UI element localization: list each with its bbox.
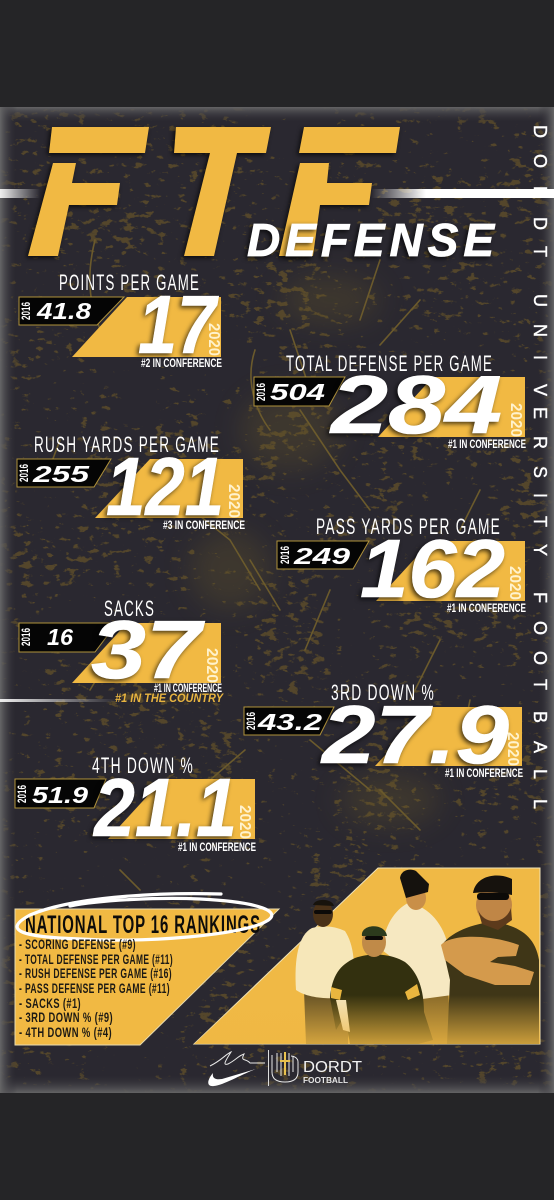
icon: dordt crest: [272, 1052, 298, 1082]
brush circle: [17, 894, 272, 940]
rank: #1 IN CONFERENCE: [178, 840, 256, 854]
vertical side text: DORDT UNIVERSITY FOOTBALL: [530, 125, 550, 809]
panel: national rankings: [15, 894, 279, 1045]
2020 value: 37: [91, 603, 206, 696]
2020 tag: 2020: [506, 566, 523, 600]
stat: pass yards per game: [277, 514, 526, 615]
2020 tag: 2020: [504, 732, 521, 766]
2016 value: 43.2: [257, 709, 322, 735]
2016 value: 504: [270, 379, 325, 405]
footer logos: [208, 1050, 362, 1086]
2020 value: 121: [106, 440, 224, 533]
2020 tag: 2020: [203, 648, 220, 683]
horizontal white streak lower: [0, 699, 117, 702]
2020 value: 17: [138, 278, 219, 371]
photo bottom fade: [194, 995, 540, 1044]
rankings list: [19, 936, 173, 1040]
2016 value: 255: [32, 461, 91, 487]
wordmark DORDT: DORDT: [303, 1059, 362, 1076]
2016 value: 51.9: [32, 782, 88, 808]
2020 tag: 2020: [236, 805, 253, 839]
2016 value: 16: [47, 624, 73, 650]
label: SACKS: [104, 596, 155, 621]
divider line: [268, 1050, 269, 1086]
2016 black box: [277, 541, 369, 569]
coach tall centre: [382, 870, 452, 1044]
2016 black box: [15, 779, 106, 808]
2020 value: 284: [329, 358, 502, 451]
stat: sacks: [19, 596, 224, 705]
2020 gold bar: [376, 541, 525, 601]
label: RUSH YARDS PER GAME: [34, 432, 220, 457]
2016 black box: [19, 623, 117, 652]
horizontal white streak top: [0, 189, 554, 198]
rankings list: - PASS DEFENSE PER GAME (#11): [19, 980, 170, 996]
2016 value: 41.8: [36, 298, 91, 324]
rankings list: - RUSH DEFENSE PER GAME (#16): [19, 965, 172, 981]
2020 gold bar: [95, 459, 243, 518]
2020 value: 162: [360, 522, 505, 615]
2016 tag: 2016: [15, 785, 29, 803]
2020 gold bar: [108, 779, 255, 839]
subtitle DEFENSE: DEFENSE: [247, 214, 495, 266]
stat: 3rd down percent: [244, 680, 523, 781]
2016 tag: 2016: [19, 302, 33, 320]
stat: 4th down percent: [15, 753, 256, 854]
rank: #1 IN CONFERENCE: [154, 681, 222, 695]
2020 gold bar: [378, 377, 525, 437]
2020 tag: 2020: [507, 403, 524, 437]
2020 gold bar: [375, 707, 522, 766]
panel: coaches photo: [194, 868, 540, 1044]
2020 gold bar: [72, 623, 221, 683]
rankings list: - 4TH DOWN % (#4): [19, 1024, 112, 1040]
icon: nike swoosh: [208, 1069, 256, 1086]
stat: total defense per game: [254, 351, 526, 451]
2016 black box: [254, 377, 345, 406]
2016 tag: 2016: [19, 628, 33, 646]
national rank: #1 IN THE COUNTRY: [115, 691, 224, 705]
coach right: [441, 876, 539, 1044]
rankings list: - TOTAL DEFENSE PER GAME (#11): [19, 951, 173, 967]
2016 tag: 2016: [17, 464, 31, 482]
heading: NATIONAL TOP 16 RANKINGS: [25, 911, 261, 939]
2016 value: 249: [293, 543, 350, 569]
2016 black box: [244, 707, 334, 735]
stat: points per game: [19, 270, 222, 371]
rankings list: - SACKS (#1): [19, 995, 81, 1011]
2016 tag: 2016: [254, 383, 268, 401]
2016 tag: 2016: [244, 712, 258, 730]
signature: [210, 1052, 265, 1066]
rankings list: - SCORING DEFENSE (#9): [19, 936, 136, 952]
2020 tag: 2020: [205, 323, 222, 356]
2020 value: 27.9: [320, 688, 509, 781]
label: 3RD DOWN %: [331, 680, 435, 705]
2016 tag: 2016: [278, 546, 292, 564]
2016 black box: [19, 297, 124, 325]
wordmark FOOTBALL: FOOTBALL: [303, 1076, 348, 1085]
label: POINTS PER GAME: [59, 270, 200, 295]
rankings list: - 3RD DOWN % (#9): [19, 1009, 113, 1025]
rank: #3 IN CONFERENCE: [163, 518, 245, 532]
2016 black box: [17, 459, 111, 487]
2020 value: 21.1: [92, 761, 237, 854]
rank: #2 IN CONFERENCE: [141, 356, 222, 370]
stat: rush yards per game: [17, 432, 245, 533]
title FTF: [28, 127, 400, 256]
2020 tag: 2020: [225, 484, 242, 518]
coach front: [330, 926, 433, 1044]
coach far left: [296, 900, 354, 1044]
label: 4TH DOWN %: [92, 753, 194, 778]
gold photo background: [194, 868, 540, 1044]
gold panel: [15, 909, 279, 1045]
2020 gold bar: [72, 297, 221, 357]
